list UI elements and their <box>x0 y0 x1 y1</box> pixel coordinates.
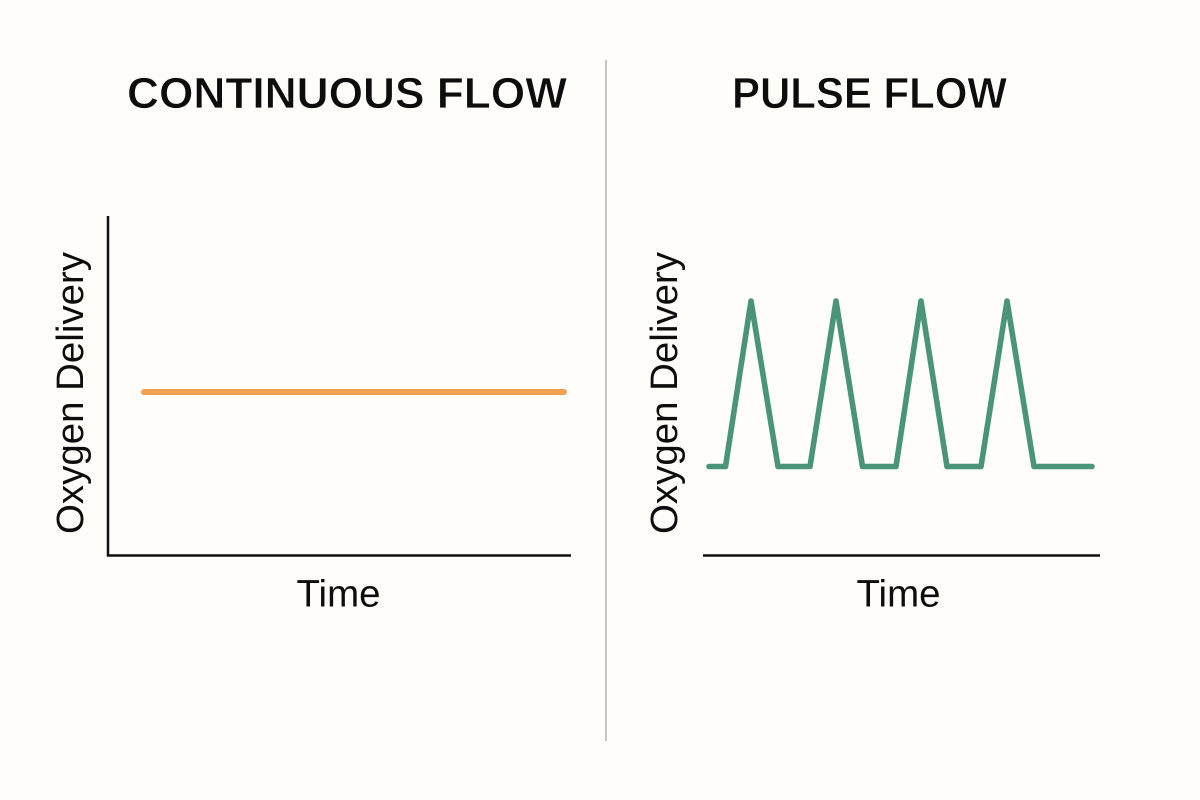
axis label: oxygen delivery: Oxygen Delivery <box>644 252 686 534</box>
line: oxygen pulses <box>709 301 1092 466</box>
chart axis: pulse flow <box>703 554 1100 557</box>
axis label: oxygen delivery: Oxygen Delivery <box>50 252 92 534</box>
heading: continuous flow: CONTINUOUS FLOW <box>127 69 567 118</box>
axis label: time: Time <box>296 574 380 616</box>
chart axes: continuous flow <box>108 216 571 556</box>
line: constant oxygen flow <box>144 389 564 395</box>
heading: pulse flow: PULSE FLOW <box>732 69 1007 118</box>
axis label: time: Time <box>856 574 940 616</box>
panel: continuous flow <box>50 69 571 616</box>
panel: pulse flow <box>644 69 1100 616</box>
